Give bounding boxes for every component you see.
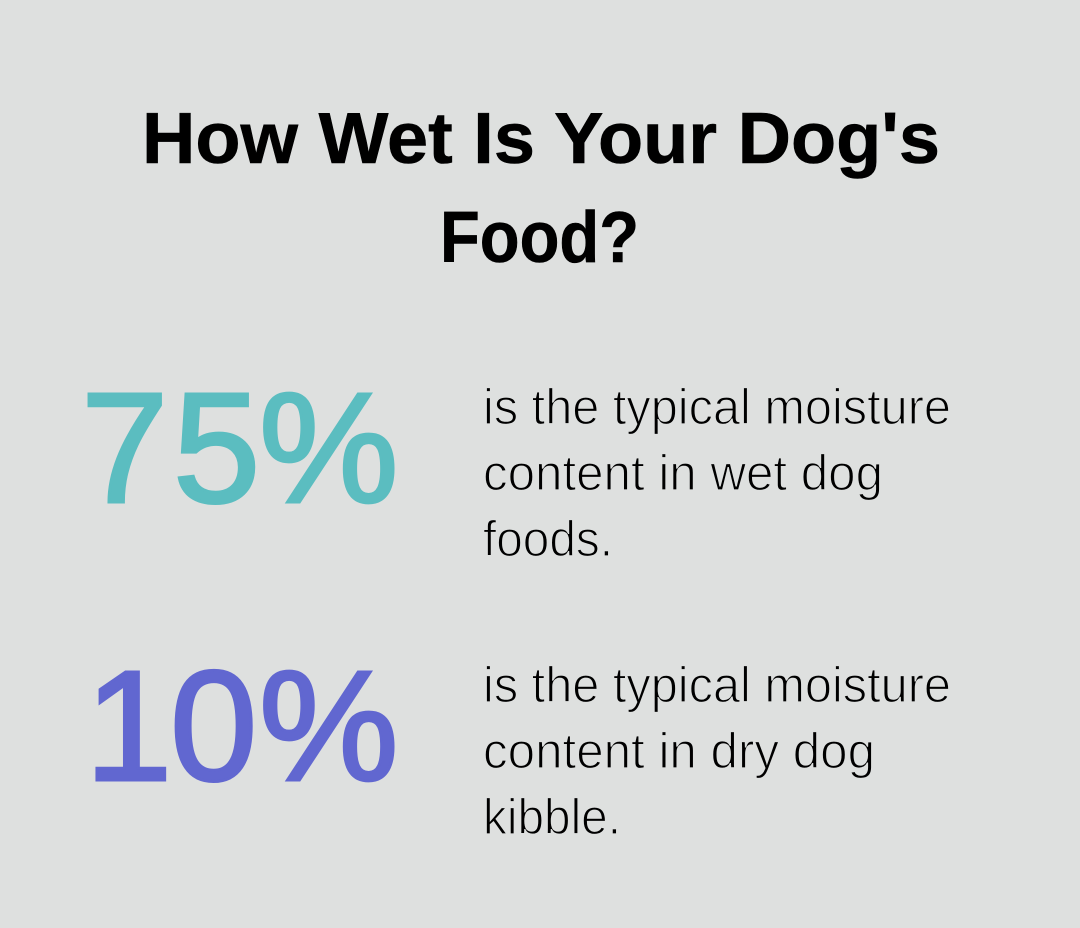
big number: 75%: 75% — [81, 361, 399, 536]
stat: 10% dry kibble — [85, 639, 951, 845]
description: wet dog food moisture — [483, 379, 951, 567]
description: dry kibble moisture: is the typical moisture — [483, 657, 951, 713]
description: wet dog food moisture: is the typical moisture — [483, 379, 951, 435]
description: dry kibble moisture: kibble. — [483, 789, 621, 845]
big number: 10%: 10% — [85, 639, 399, 814]
title: How Wet Is Your Dog's — [142, 99, 940, 179]
title — [142, 99, 940, 278]
title: Food? — [440, 198, 639, 278]
description: dry kibble moisture — [483, 657, 951, 845]
stat: 75% wet food — [81, 361, 951, 567]
description: wet dog food moisture: content in wet dog — [483, 445, 883, 501]
description: wet dog food moisture: foods. — [483, 511, 613, 567]
description: dry kibble moisture: content in dry dog — [483, 723, 875, 779]
